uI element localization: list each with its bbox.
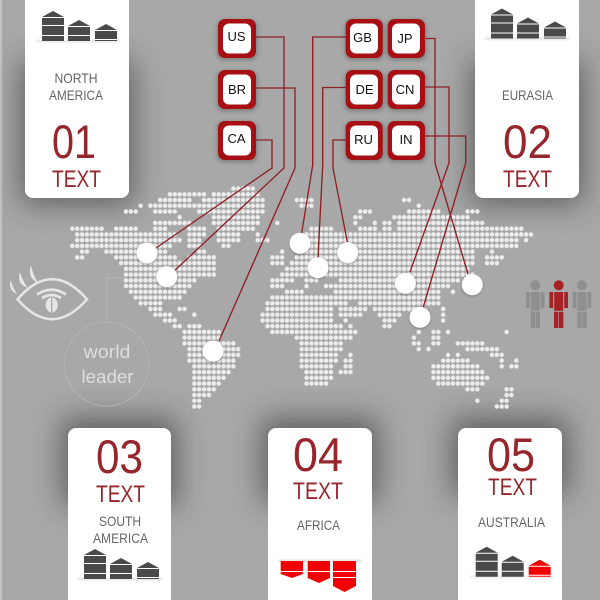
- number 04: 04: [293, 428, 343, 481]
- panel: North America: [25, 0, 129, 198]
- button: IN: [388, 121, 425, 160]
- world dot map: [70, 186, 533, 409]
- region label: AUSTRALIA: [478, 514, 546, 530]
- text label: TEXT: [503, 166, 552, 193]
- region label: SOUTH: [99, 513, 141, 529]
- icon: eye: [10, 265, 87, 319]
- button: CA: CA: [227, 131, 246, 146]
- panel: Africa: [268, 428, 372, 600]
- region label: AMERICA: [93, 530, 149, 546]
- number 01: 01: [52, 115, 96, 168]
- number 05: 05: [487, 428, 535, 481]
- icon: bars north america: [36, 11, 120, 42]
- button: JP: [388, 19, 425, 58]
- text label: TEXT: [52, 166, 101, 193]
- connector lines: [156, 37, 468, 341]
- button: GB: [346, 19, 383, 58]
- callout: world leader: world: [82, 342, 130, 362]
- connector: eye to label: [107, 278, 124, 322]
- icon: bars south america: [78, 549, 162, 580]
- button: BR: BR: [228, 82, 246, 97]
- icon: people: [526, 280, 591, 328]
- button: JP: JP: [397, 31, 413, 46]
- button: IN: IN: [400, 132, 412, 147]
- icon: red down bars: [278, 561, 362, 592]
- region label: AFRICA: [297, 517, 341, 533]
- icon: bars eurasia: [485, 8, 569, 39]
- button: RU: [346, 121, 383, 160]
- person gray right: [573, 280, 591, 328]
- button: DE: DE: [355, 82, 374, 97]
- button: CN: CN: [396, 82, 414, 97]
- button: RU: RU: [354, 132, 373, 147]
- text label: TEXT: [488, 474, 537, 501]
- region label: EURASIA: [502, 87, 554, 103]
- panel: Australia: [458, 428, 562, 600]
- button: CA: [218, 121, 256, 160]
- panel: South America: [68, 428, 171, 600]
- person gray left: [526, 280, 545, 328]
- icon: bars with red bar: [470, 547, 554, 577]
- panel: Eurasia: [475, 0, 579, 198]
- number 03: 03: [96, 430, 143, 483]
- map nodes: [136, 233, 483, 363]
- button: US: US: [227, 29, 246, 44]
- button: CN: [388, 70, 425, 109]
- number 02: 02: [503, 115, 552, 168]
- button: DE: [346, 70, 383, 109]
- text label: TEXT: [293, 478, 343, 505]
- callout: world leader: leader: [82, 367, 134, 387]
- country button shadows: [217, 20, 426, 162]
- callout: world leader: [65, 322, 149, 406]
- text label: TEXT: [96, 481, 145, 508]
- region label: NORTH: [54, 70, 98, 86]
- button: US: [218, 19, 256, 58]
- person red: [549, 280, 568, 328]
- button: BR: [218, 70, 256, 109]
- region label: AMERICA: [49, 87, 104, 103]
- button: GB: GB: [353, 30, 372, 45]
